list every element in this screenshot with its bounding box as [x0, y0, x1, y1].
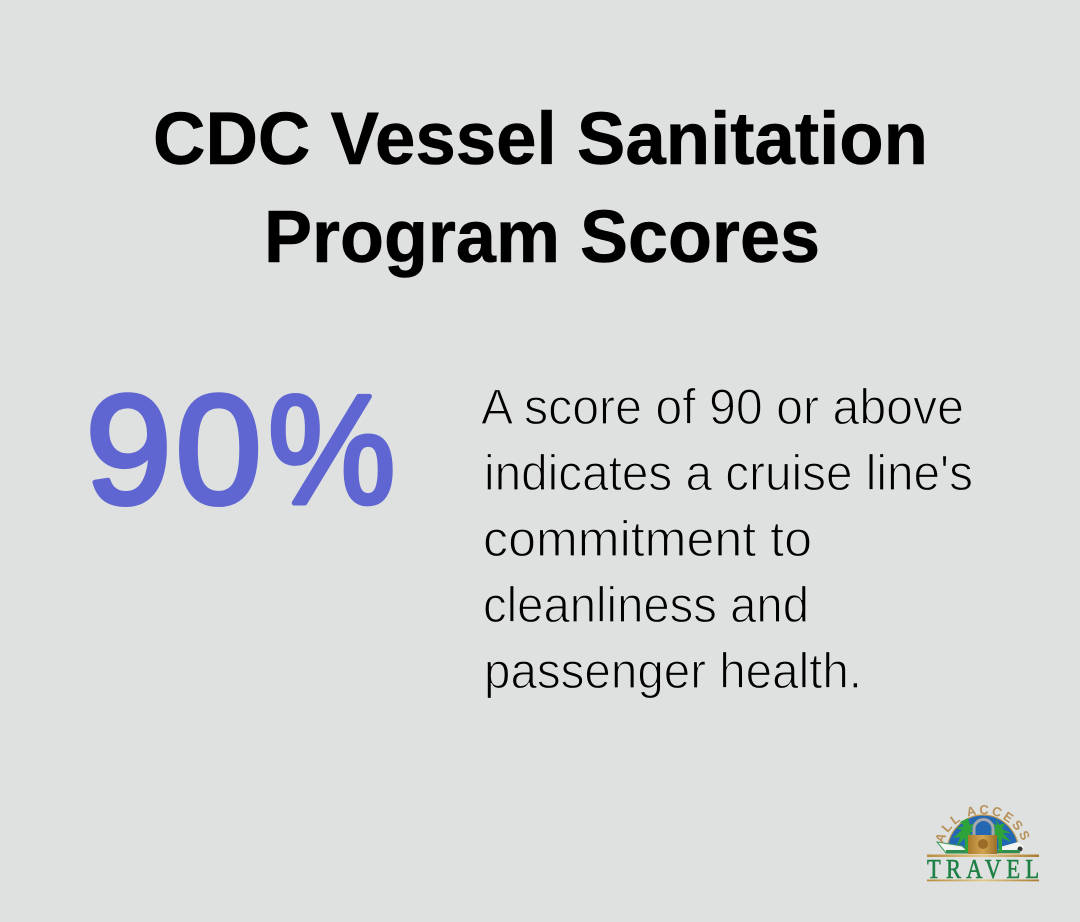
description text: commitment to [483, 511, 812, 567]
description text [481, 379, 973, 699]
logo: ALL ACCESS lettering: ALL ACCESS [936, 805, 1030, 844]
statistic: 90% [86, 363, 395, 536]
description text: passenger health. [484, 643, 862, 699]
logo: padlock [968, 820, 997, 854]
logo: All Access Travel [927, 805, 1044, 885]
logo: TRAVEL wordmark: TRAVEL [927, 855, 1044, 885]
logo: boats [937, 842, 1024, 853]
title [153, 97, 928, 278]
logo: globe dome [947, 815, 1019, 853]
statistic: 90%: % [268, 363, 395, 536]
logo: gold rules [927, 854, 1039, 881]
statistic: 90%: 90 [86, 363, 262, 536]
title: CDC Vessel Sanitation [153, 97, 928, 180]
description text: A score of 90 or above [481, 379, 964, 435]
title: Program Scores [264, 195, 820, 278]
logo: palm trees [953, 818, 1011, 852]
description text: cleanliness and [483, 577, 809, 633]
description text: indicates a cruise line's [484, 445, 973, 501]
